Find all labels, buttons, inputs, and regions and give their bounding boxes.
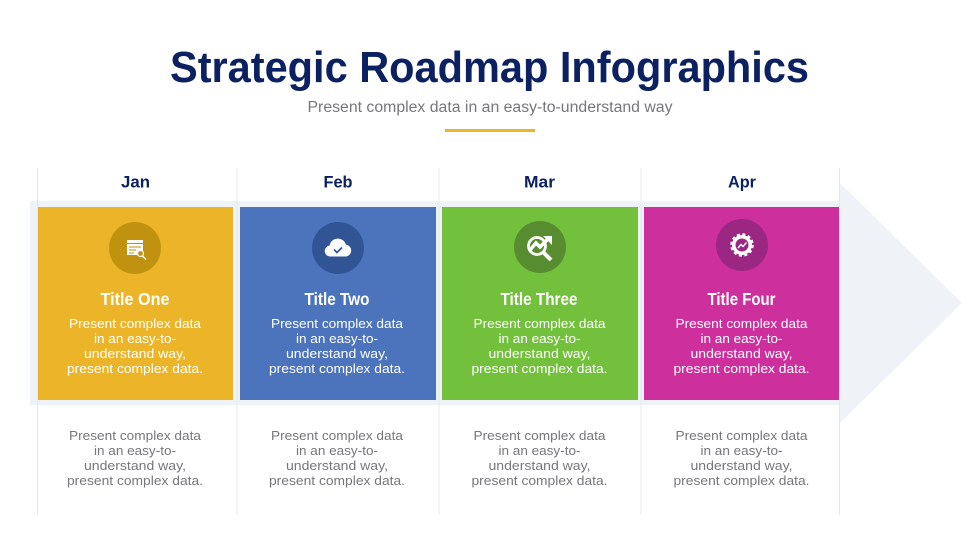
icon: cloud with check — [312, 222, 364, 274]
lower text: January: in an easy-to- — [94, 443, 176, 458]
card text: in an easy-to- — [296, 331, 378, 346]
card: Title One — [38, 207, 233, 400]
panel: April — [644, 172, 839, 488]
lower text: April: understand way, — [690, 458, 792, 473]
panel: January — [38, 172, 233, 488]
lower text: January: present complex data. — [67, 473, 203, 488]
panel: February — [240, 172, 436, 488]
heading: Title Three: Title Three — [500, 289, 578, 309]
month: Jan: Jan — [121, 172, 150, 192]
card text: in an easy-to- — [700, 331, 782, 346]
lower text: February: in an easy-to- — [296, 443, 378, 458]
card text: present complex data. — [674, 361, 810, 376]
subtitle: Present complex data in an easy-to-understand way — [308, 99, 673, 116]
card text: Present complex data — [676, 316, 808, 331]
lower text: March: in an easy-to- — [498, 443, 580, 458]
card text: present complex data. — [472, 361, 608, 376]
lower text: April — [674, 428, 810, 488]
card: Title Four — [644, 207, 839, 400]
lower text: January: understand way, — [84, 458, 186, 473]
lower text: March: Present complex data — [474, 428, 606, 443]
card text — [67, 316, 203, 376]
accent underline — [445, 129, 535, 132]
lower text: April: present complex data. — [674, 473, 810, 488]
card text — [472, 316, 608, 376]
background arrow — [30, 182, 962, 424]
month: Apr: Apr — [728, 172, 756, 192]
lower text: March: present complex data. — [472, 473, 608, 488]
card text: Present complex data — [271, 316, 404, 331]
lower text: January: Present complex data — [69, 428, 202, 443]
heading: Title One: Title One — [100, 289, 170, 309]
card text: present complex data. — [67, 361, 203, 376]
icon: growth chart with magnifier — [514, 221, 566, 273]
lower text: February: understand way, — [286, 458, 388, 473]
icon: gear with chart — [716, 219, 768, 271]
card text: understand way, — [488, 346, 590, 361]
lower text: February — [269, 428, 405, 488]
lower text: January — [67, 428, 203, 488]
card text: Present complex data — [69, 316, 202, 331]
heading: Title Four: Title Four — [708, 289, 776, 309]
card text: Present complex data — [474, 316, 606, 331]
lower text: February: Present complex data — [271, 428, 404, 443]
lower text: February: present complex data. — [269, 473, 405, 488]
lower text: March — [472, 428, 608, 488]
card: Title Two — [240, 207, 436, 400]
icon: report with magnifier — [109, 222, 161, 274]
card text: understand way, — [286, 346, 388, 361]
heading: Title Two: Title Two — [304, 289, 370, 309]
lower text: April: in an easy-to- — [700, 443, 782, 458]
month: Feb: Feb — [324, 172, 352, 192]
panel: March — [442, 172, 638, 488]
card text — [674, 316, 810, 376]
card text: present complex data. — [269, 361, 405, 376]
card: Title Three — [442, 207, 638, 400]
lower text: April: Present complex data — [676, 428, 808, 443]
title: Strategic Roadmap Infographics — [170, 43, 809, 92]
card text: understand way, — [690, 346, 792, 361]
card text: in an easy-to- — [498, 331, 580, 346]
card text — [269, 316, 405, 376]
card text: understand way, — [84, 346, 186, 361]
card text: in an easy-to- — [94, 331, 176, 346]
month: Mar: Mar — [524, 172, 555, 192]
lower text: March: understand way, — [488, 458, 590, 473]
